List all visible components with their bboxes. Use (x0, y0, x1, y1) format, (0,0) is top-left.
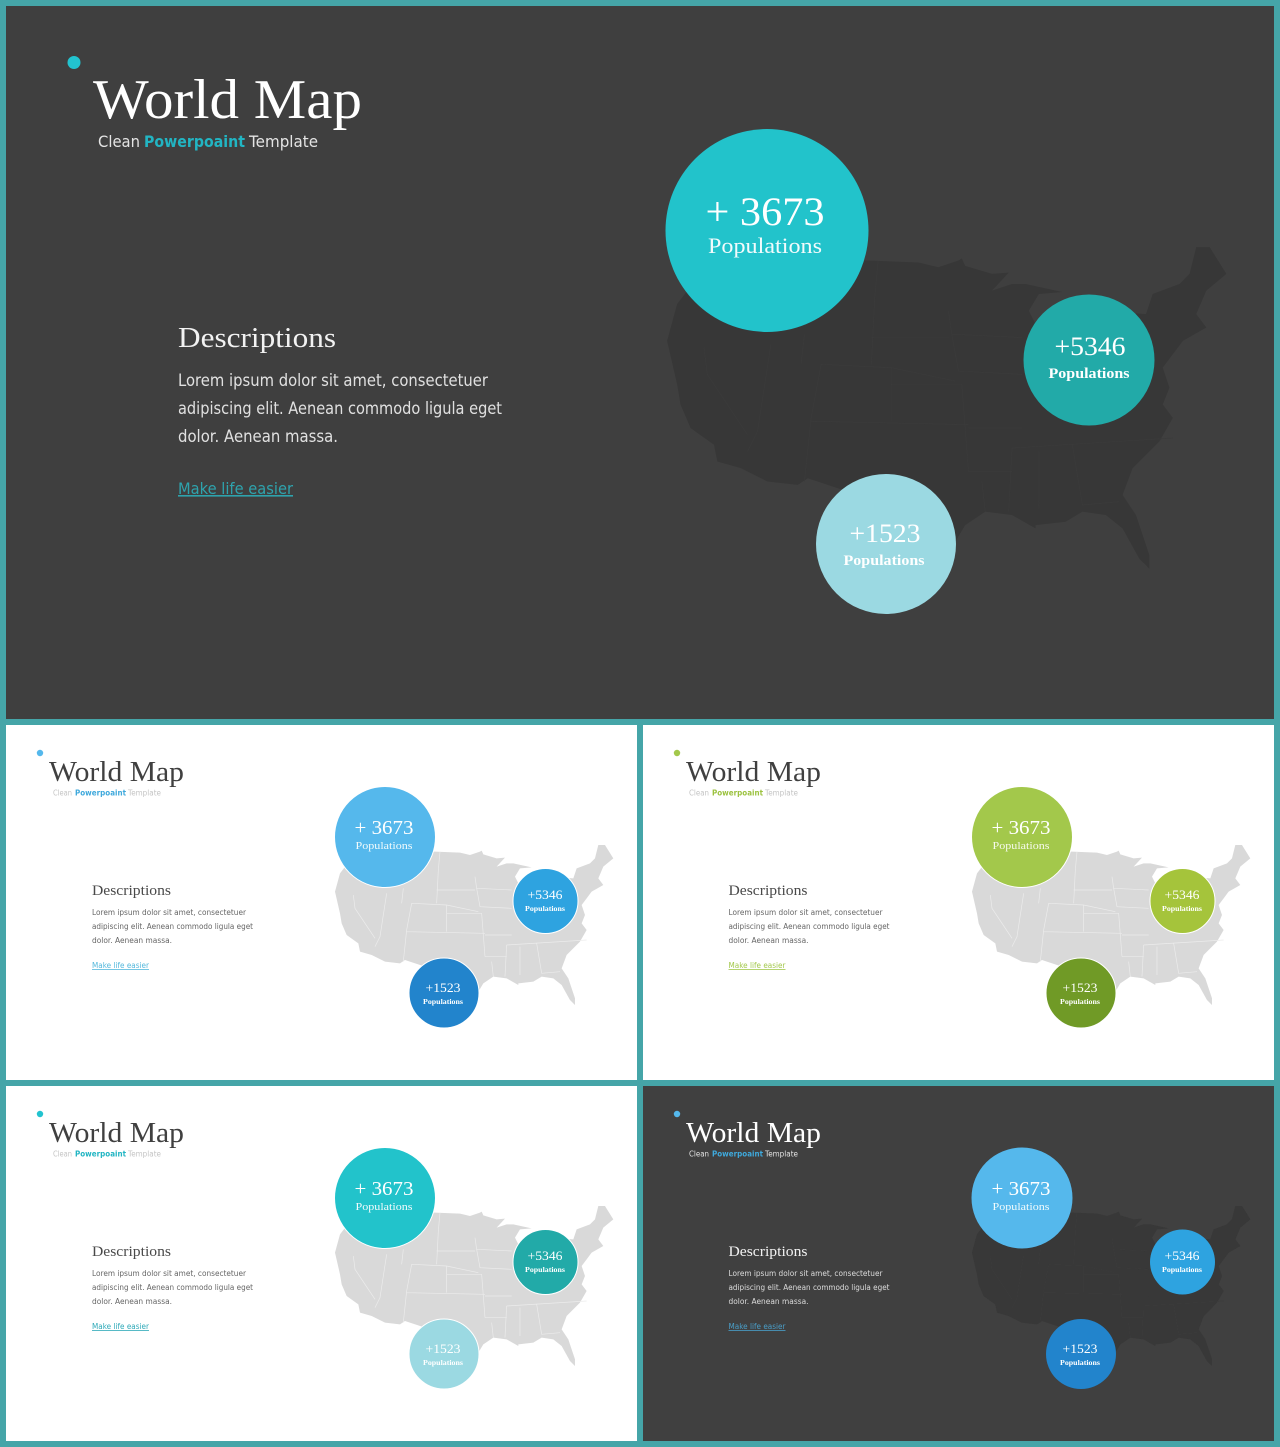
bubble: 1523: Populations (1060, 1358, 1100, 1367)
bubble: 3673: + 3673 (992, 1178, 1050, 1200)
text block: body: adipiscing elit. Aenean commodo ligula eget (728, 921, 890, 931)
map: USA (972, 845, 1250, 1010)
heading: descriptions: Descriptions (728, 1244, 808, 1260)
subtitle (689, 1150, 798, 1158)
bubble: 1523: Populations (844, 553, 925, 569)
text block: body: adipiscing elit. Aenean commodo ligula eget (728, 1282, 890, 1292)
icon: accent dot (674, 750, 680, 756)
bubble: 5346 (1024, 294, 1154, 426)
bubble: 5346: Populations (525, 904, 565, 913)
map: USA (335, 845, 613, 1010)
bubble: 5346 (513, 868, 578, 934)
subtitle: Powerpoaint (712, 788, 763, 798)
link: Make life easier (728, 961, 786, 970)
link: Make life easier (728, 1322, 786, 1331)
panel: white slide, blue theme (6, 725, 637, 1080)
text block: body: dolor. Aenean massa. (728, 1296, 808, 1306)
bubble: 3673: Populations (708, 233, 822, 258)
link: Make life easier (92, 1322, 150, 1331)
bubble: 3673: + 3673 (354, 1178, 414, 1200)
subtitle: Clean (689, 1150, 709, 1158)
icon: accent dot (37, 1111, 43, 1117)
subtitle: Powerpoaint (75, 788, 126, 798)
bubble: 3673 (972, 786, 1072, 888)
bubble: 5346: +5346 (528, 887, 563, 902)
bubble: 3673 (334, 786, 436, 888)
text block: body: Lorem ipsum dolor sit amet, consectetuer (728, 1268, 883, 1278)
heading: descriptions: Descriptions (92, 1244, 171, 1260)
bubble: 5346: +5346 (1164, 887, 1200, 902)
bubble: 5346: Populations (1048, 366, 1130, 382)
subtitle: Clean (689, 788, 709, 798)
bubble: 1523 (409, 1319, 479, 1389)
bubble: 3673: Populations (356, 1201, 412, 1213)
title: World Map (93, 69, 362, 131)
subtitle: Clean (53, 788, 72, 798)
subtitle: Powerpoaint (75, 1150, 126, 1158)
bubble: 5346: +5346 (528, 1248, 563, 1263)
text block: body: dolor. Aenean massa. (178, 427, 338, 446)
heading: descriptions: Descriptions (728, 883, 808, 899)
subtitle: Template (127, 788, 161, 798)
icon: accent dot (68, 56, 80, 69)
text block: body: Lorem ipsum dolor sit amet, consectetuer (178, 371, 488, 390)
text block: body: Lorem ipsum dolor sit amet, consectetuer (728, 907, 883, 917)
subtitle: Clean (53, 1150, 72, 1158)
heading: descriptions: Descriptions (92, 883, 171, 899)
subtitle: Template (127, 1150, 161, 1158)
text block: body: dolor. Aenean massa. (92, 935, 172, 945)
subtitle: Powerpoaint (712, 1150, 763, 1158)
subtitle: Clean (98, 132, 140, 151)
bubble: 1523: Populations (423, 997, 463, 1006)
bubble: 5346 (1150, 868, 1215, 934)
panel: dark slide, blue theme (643, 1086, 1274, 1441)
bubble: 5346 (1150, 1230, 1215, 1294)
text block: body (728, 1268, 890, 1306)
subtitle: Template (248, 132, 318, 151)
bubble: 1523 (1046, 958, 1116, 1028)
panel: white slide, green theme (643, 725, 1274, 1080)
bubble: 3673: Populations (992, 1201, 1050, 1213)
bubble: 1523: +1523 (1062, 1341, 1098, 1356)
bubble: 1523 (816, 474, 956, 614)
link: Make life easier (178, 479, 293, 498)
text block: body: adipiscing elit. Aenean commodo ligula eget (92, 921, 254, 931)
text block: body (92, 907, 254, 945)
text block: body: dolor. Aenean massa. (92, 1296, 172, 1306)
bubble: 1523: +1523 (426, 980, 460, 995)
subtitle (689, 788, 798, 798)
text block: body: Lorem ipsum dolor sit amet, consectetuer (92, 907, 247, 917)
panel: large dark slide (6, 6, 1274, 719)
icon: accent dot (37, 750, 43, 756)
text block: body (178, 371, 502, 446)
bubble: 5346: Populations (525, 1265, 565, 1274)
bubble: 3673: + 3673 (354, 817, 414, 839)
subtitle: Powerpoaint (144, 132, 245, 151)
subtitle (53, 788, 161, 798)
bubble: 1523 (1046, 1319, 1116, 1389)
title: World Map (49, 1118, 184, 1149)
bubble: 1523: +1523 (1062, 980, 1098, 995)
bubble: 5346: +5346 (1054, 332, 1126, 361)
subtitle (98, 132, 318, 151)
heading: descriptions: Descriptions (178, 322, 336, 354)
link: Make life easier (92, 961, 150, 970)
subtitle: Template (764, 788, 798, 798)
bubble: 5346: +5346 (1164, 1248, 1200, 1263)
bubble: 1523: Populations (423, 1358, 463, 1367)
subtitle: Template (764, 1150, 798, 1158)
bubble: 3673: Populations (992, 840, 1050, 852)
map: USA (335, 1206, 613, 1371)
bubble: 5346 (513, 1230, 578, 1294)
text block: body: dolor. Aenean massa. (728, 935, 808, 945)
text block: body: adipiscing elit. Aenean commodo ligula eget (92, 1282, 254, 1292)
panel: white slide, teal theme (6, 1086, 637, 1441)
bubble: 1523: +1523 (850, 519, 920, 548)
bubble: 3673: Populations (356, 840, 412, 852)
bubble: 3673: + 3673 (706, 189, 824, 234)
bubble: 1523 (409, 958, 479, 1028)
icon: accent dot (674, 1111, 680, 1117)
bubble: 3673 (972, 1148, 1072, 1248)
bubble: 3673 (334, 1148, 436, 1248)
bubble: 3673 (666, 129, 868, 332)
bubble: 5346: Populations (1162, 904, 1202, 913)
title: World Map (686, 757, 821, 788)
bubble: 3673: + 3673 (992, 817, 1050, 839)
text block: body: Lorem ipsum dolor sit amet, consectetuer (92, 1268, 247, 1278)
bubble: 1523: Populations (1060, 997, 1100, 1006)
subtitle (53, 1150, 161, 1158)
bubble: 1523: +1523 (426, 1341, 460, 1356)
text block: body: adipiscing elit. Aenean commodo ligula eget (178, 399, 502, 418)
text block: body (728, 907, 890, 945)
map: USA (972, 1206, 1250, 1371)
bubble: 5346: Populations (1162, 1265, 1202, 1274)
text block: body (92, 1268, 254, 1306)
map: USA (667, 247, 1226, 579)
title: World Map (49, 757, 184, 788)
title: World Map (686, 1118, 821, 1149)
